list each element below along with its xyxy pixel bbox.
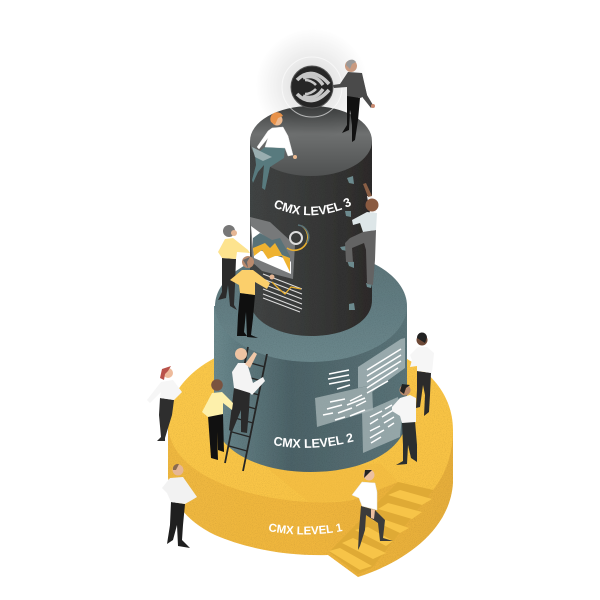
person: man at logo <box>333 60 375 142</box>
person: woman with red hair <box>147 366 182 441</box>
person: man on ladder <box>229 348 265 433</box>
person: climber <box>345 183 378 285</box>
person: thinking man <box>392 384 417 465</box>
person: man upper right <box>410 332 434 416</box>
person: man in yellow <box>230 256 274 338</box>
person: seated woman with laptop <box>252 112 297 190</box>
ladder <box>225 347 267 471</box>
climbing holds <box>340 176 372 310</box>
target ring <box>287 225 309 250</box>
stairs <box>329 482 433 574</box>
info panels <box>315 338 405 453</box>
label: CMX Level 1: CMX LEVEL 1 <box>269 524 342 534</box>
level 2 teal cylinder <box>214 250 407 472</box>
label: CMX Level 2: CMX LEVEL 2 <box>274 433 354 448</box>
label: CMX Level 3: CMX LEVEL 3 <box>274 198 351 216</box>
person: man bottom left <box>162 464 197 548</box>
level 1 yellow platform <box>168 337 453 577</box>
person: man in pale yellow <box>202 379 233 460</box>
level 3 dark cylinder <box>250 106 372 336</box>
person: man on stairs <box>352 470 393 550</box>
person: woman in yellow <box>218 225 250 310</box>
logo with glow <box>256 29 368 141</box>
screen chart <box>250 217 309 312</box>
